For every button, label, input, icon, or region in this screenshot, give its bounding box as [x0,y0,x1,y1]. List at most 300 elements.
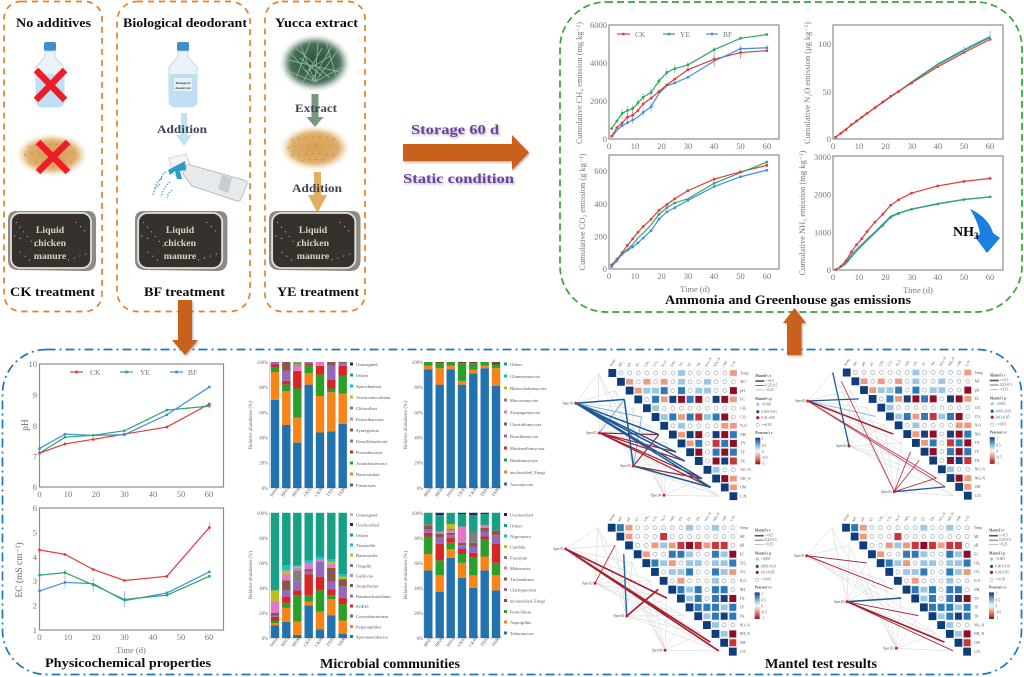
chart: cumulative CH4 emission: 60 [763,141,771,151]
legend: fungi phylum: Zoopagomycota [510,410,540,415]
legend: bacteria genus: Peptoniphilus [356,624,381,630]
chart: stacked bars bacteria phylum: BF060 [291,484,303,498]
chart: stacked bars bacteria genus: BF030 [280,634,292,648]
chart: stacked bars fungi phylum: Initial [445,485,456,498]
heading: no additives: No additives [16,15,91,30]
chart: mantel test top left: Spec03 [620,464,631,468]
chart: mantel test bottom right: TN [974,597,979,601]
chart: mantel test top right: 0.5 [996,444,1001,448]
heading: ammonia and greenhouse gas emissions: Ammonia and Greenhouse gas emissions [665,292,911,307]
legend: bacteria phylum: Chloroflexi [356,406,378,411]
chart: cumulative N2O emission: 10 [855,141,863,151]
chart: mantel test bottom left: <0.25 [765,543,773,547]
chart: stacked bars bacteria genus: CK030 [302,633,315,648]
legend: bacteria genus: Unassigned [356,512,378,518]
chart: cumulative CO2 emission: 400 [594,199,607,209]
chart: cumulative CH4 emission: 0 [607,141,611,151]
chart: mantel test top right: TP [921,361,927,367]
chart: cumulative CH4 emission: 4000 [590,58,607,68]
chart: cumulative NH3 emission: 0 [827,265,831,275]
chart: EC: 5 [33,528,37,538]
icon: yucca plant [280,35,350,91]
chart: mantel test bottom left: >=0.05 [761,578,771,582]
chart: cumulative CH4 emission: 50 [736,141,745,151]
chart: mantel test top right: TN [913,361,919,367]
chart: EC: 20 [92,632,100,642]
chart: stacked bars fungi phylum: 80% [414,386,423,391]
chart: mantel test top right: pH [861,361,866,367]
chart: mantel test bottom left: NH₃ [669,514,676,522]
chart: stacked bars bacteria genus: 20% [259,612,268,617]
chart: mantel test top right: OM [975,485,981,489]
chart: stacked bars bacteria genus: Relative abundance (%) [249,551,254,599]
legend: bacteria phylum: Proteobacteria [356,450,383,455]
chart: mantel test top right: CH₄ [975,406,982,410]
chart: stacked bars bacteria genus [249,512,391,648]
chart: mantel test top right: pH [975,388,979,392]
heading: biological deodorant: Biological deodorant [123,15,248,30]
chart: stacked bars bacteria phylum: CK030 [302,483,315,498]
legend: fungi phylum: Others [510,362,522,367]
chart: mantel test bottom right: NH₄-N [974,632,985,636]
legend: fungi phylum: Ascomycota [510,482,533,487]
icon: deodorant bottle: deodorant [175,86,192,90]
chart: cumulative N2O emission: 60 [986,141,994,151]
chart: mantel test top right: <0.25 [1000,388,1008,392]
chart: mantel test bottom left: Temp [740,526,748,530]
legend: fungi genus: Malassezia [510,566,530,571]
chart: mantel test bottom right: Pearson's r [989,586,1007,590]
icon: liquid chicken manure tray: manure [164,251,197,262]
chart: cumulative N2O emission: 100 [818,39,831,49]
chart: mantel test bottom left: CO₂ [740,570,747,574]
chart: stacked bars bacteria phylum: 80% [259,386,268,391]
chart: mantel test top left: pH [626,361,632,368]
chart: mantel test top left: NH₃ [740,433,747,437]
legend: fungi phylum: Blastocladiomycota [510,386,546,391]
chart: mantel test bottom left: OM [740,641,746,645]
legend: fungi phylum: unclassified_Fungi [510,470,546,475]
chart: mantel test bottom right: TP [920,517,926,522]
chart: mantel test bottom right: 0.001-0.01 [995,565,1011,569]
legend: fungi genus: Cladosporium [510,588,536,592]
chart: stacked bars fungi genus: Relative abundance (%) [404,551,409,599]
chart: cumulative CH4 emission: 10 [631,141,639,151]
label: BF treatment: BF treatment [144,284,226,299]
icon: crossed-out bottle [36,42,65,107]
chart: mantel test top right: <0.001 [996,402,1006,406]
chart: stacked bars bacteria phylum: 100% [257,361,268,366]
chart: stacked bars fungi genus: 0% [417,637,423,642]
chart: cumulative N2O emission: 0 [831,141,835,151]
legend: bacteria phylum: Bacteroidota [356,472,379,477]
chart: cumulative CO2 emission: Time (d) [680,284,710,294]
chart: mantel test top right: Temp [843,358,851,367]
chart: mantel test bottom right: N₂O [894,514,901,522]
chart: mantel test bottom left: TN [740,597,745,601]
chart: mantel test top left: >=0.05 [761,423,772,427]
heading: microbial communities: Microbial communities [320,657,461,672]
label: YE treatment: YE treatment [277,284,360,299]
chart: pH: CK [90,368,101,377]
chart: mantel test bottom right: CO₂ [886,514,893,522]
legend: fungi genus: Trichoderma [510,577,534,582]
chart: mantel test top right: NH₃ [904,359,911,367]
chart: mantel test top left: Spec01 [563,402,573,406]
chart: stacked bars bacteria genus: BF060 [291,634,303,648]
chart: mantel test top right: -1 [996,462,999,466]
chart: cumulative N2O emission: Cumulative N₂O emission (μg kg⁻¹) [803,22,812,144]
chart: mantel test bottom right: NO₃-N [974,623,985,627]
chart: cumulative NH3 emission: 3000 [814,152,831,162]
chart: mantel test top left: pH [740,389,745,393]
chart: mantel test top left [563,356,777,499]
chart: pH: 10 [64,489,72,499]
chart: mantel test top right: TP [975,450,979,454]
chart: mantel test bottom right: Spec02 [834,600,845,604]
chart: mantel test bottom left: NO₃-N [740,623,750,627]
chart: mantel test bottom right: OM [955,514,962,522]
chart: mantel test bottom left: MC [617,515,624,522]
chart: pH: 30 [120,489,129,499]
chart: mantel test top left: TK [740,459,745,463]
chart: mantel test bottom left: TP [740,606,744,610]
chart: mantel test top left: NH₄-N [740,477,751,481]
chart: stacked bars fungi genus: 100% [412,512,423,517]
legend: bacteria genus: Atopobacter [356,584,379,588]
chart: mantel test bottom left: NH₄-N [712,511,721,522]
chart: mantel test bottom left: TP [686,517,692,522]
icon: deodorant bottle [169,42,197,107]
icon: liquid chicken manure tray: manure [34,251,67,262]
legend: fungi phylum: Basidiomycota [510,458,538,463]
legend: fungi phylum: Rozellomycota [510,434,538,439]
chart: pH: 9 [33,390,37,400]
chart: cumulative N2O emission: 20 [881,141,890,151]
chart: mantel test bottom right: NH₄-N [946,511,955,522]
chart: mantel test top right: Spec01 [795,399,806,403]
chart: mantel test bottom left: EC [740,553,745,557]
chart: mantel test top right: MC [975,380,981,384]
chart: stacked bars fungi phylum: 0% [417,487,423,492]
legend: fungi genus: Penicillium [510,610,532,614]
chart: stacked bars fungi genus: CK030 [456,633,469,648]
chart: pH: pH [21,419,31,431]
chart: mantel test top right: CO₂ [975,415,982,419]
legend: fungi phylum: Mucoromycota [510,398,538,403]
chart: mantel test top right: Spec03 [881,490,892,494]
chart: mantel test top left: CO₂ [740,415,747,419]
chart: mantel test top right [795,356,1012,498]
chart: mantel test bottom left: TK [740,615,745,619]
chart: stacked bars bacteria genus: YE060 [336,633,348,648]
legend: fungi phylum [504,362,546,487]
chart: mantel test top left: 0.25-0.5 [765,384,777,388]
chart: EC: 30 [120,632,129,642]
chart: mantel test top left: OM [740,486,747,490]
chart: mantel test bottom right: NH₃ [903,514,910,522]
chart: mantel test bottom left: <0.001 [761,557,771,561]
chart: mantel test top right: 0.001-0.01 [996,410,1011,414]
chart: mantel test bottom left: CH₄ [740,561,747,565]
panel: BF treatment [117,2,250,312]
chart: mantel test bottom right: 1 [996,592,998,596]
chart: mantel test top right: NO₃-N [975,468,985,472]
chart: stacked bars bacteria genus: 0% [262,637,268,642]
legend: fungi genus: Aspergillus [510,620,531,625]
chart: mantel test bottom left: MC [740,535,746,539]
chart: mantel test top left: 1 [762,437,764,441]
chart: mantel test top left: OM [722,360,728,368]
chart: mantel test bottom right: Spec03 [883,647,894,651]
chart: mantel test top right: EC [869,361,875,367]
chart: mantel test top left: -0.5 [762,456,768,460]
chart: EC: EC (mS cm⁻¹) [14,542,25,598]
chart: mantel test bottom left: CO₂ [652,514,659,522]
chart: stacked bars bacteria genus: 60% [259,562,268,567]
chart: cumulative NH3 emission: Cumulative NH₃ emission (mg kg⁻¹) [798,150,807,276]
chart: mantel test bottom left: 0.001-0.01 [761,565,776,569]
legend: fungi phylum: Chytridiomycota [510,422,541,427]
chart: mantel test top right: N₂O [975,424,982,428]
chart: mantel test bottom right: 0 [996,605,998,609]
chart: cumulative CH4 emission: 2000 [590,96,607,106]
chart: mantel test bottom right: CO₂ [974,570,981,574]
chart: stacked bars fungi phylum: 20% [414,462,423,466]
chart: cumulative CO2 emission: 30 [684,271,692,281]
chart: stacked bars bacteria phylum: YE060 [336,483,348,498]
chart: mantel test bottom left: Spec02 [582,582,593,586]
panel: ammonia and greenhouse gas emissions [560,2,1022,312]
chart: mantel test bottom right: pH [974,544,979,548]
chart: mantel test top left: C/N [740,495,747,499]
chart: stacked bars fungi genus: BF030 [423,634,434,648]
chart: stacked bars fungi phylum: 100% [412,361,423,366]
chart: mantel test top right: NH₄-N [975,476,985,480]
chart: stacked bars bacteria phylum: YE030 [325,483,337,498]
chart: pH: 0 [37,489,42,499]
chart: mantel test bottom left: NO₃-N [704,511,712,522]
chart: cumulative CH4 emission [575,20,779,151]
chart: stacked bars bacteria genus: CK060 [314,633,326,648]
chart: cumulative NH3 emission: 0 [831,272,835,282]
chart: mantel test top right: CH₄ [878,359,885,367]
chart: mantel test top right: Mantel's r [990,374,1006,378]
chart: stacked bars fungi phylum: YE030 [479,483,491,498]
chart: mantel test bottom left: 0.01-0.05 [761,571,775,575]
chart: mantel test bottom right [794,511,1011,654]
chart: mantel test bottom right: CH₄ [877,514,884,522]
chart: mantel test bottom left: TN [678,516,684,522]
chart: mantel test bottom left: N₂O [740,579,747,583]
chart: cumulative N2O emission: 30 [908,141,916,151]
legend: bacteria genus: Ruminiclostridium [356,594,391,599]
chart: mantel test top right: TN [975,441,980,445]
chart: stacked bars bacteria genus: 40% [259,587,268,592]
chart: stacked bars bacteria genus: 80% [259,537,268,542]
chart: pH: 60 [205,489,213,499]
chart: mantel test bottom left: >=0.5 [765,534,773,538]
chart: mantel test top right: 0.01-0.05 [996,416,1010,420]
legend: bacteria phylum: Unassigned [356,362,378,367]
chart: mantel test top right: Pearson's r [990,430,1007,434]
chart: mantel test top left: Pearson's r [755,431,773,435]
legend: bacteria genus: Corynebacterium [356,614,388,619]
chart: cumulative CH4 emission: BF [723,30,732,39]
icon: liquid chicken manure tray [8,211,96,271]
legend: fungi phylum: Mortierellomycota [510,446,544,451]
chart: mantel test top left: CO₂ [652,359,659,368]
chart: EC [14,503,224,655]
chart: cumulative CO2 emission: 40 [710,271,718,281]
chart: stacked bars bacteria genus: YE030 [325,633,337,648]
heading: yucca extract: Yucca extract [275,15,359,30]
chart: cumulative NH3 emission: 50 [960,272,968,282]
chart: cumulative CO2 emission: 0 [603,264,607,274]
label: CK treatment: CK treatment [10,284,96,299]
legend: fungi genus: Unclassified [510,512,534,518]
chart: cumulative N2O emission [803,22,1003,151]
chart: pH: BF [188,368,197,377]
icon: liquid chicken manure tray: manure [297,251,330,262]
chart: mantel test bottom right: TK [929,516,935,522]
chart: mantel test bottom right: EC [868,516,874,522]
chart: mantel test bottom left: N₂O [660,514,667,522]
chart: mantel test top left: Temp [740,371,748,375]
chart: stacked bars fungi genus: 20% [414,612,423,617]
chart: mantel test bottom left: TK [695,516,701,522]
legend: fungi genus: Candida [510,544,525,550]
chart: mantel test bottom right: Spec01 [794,554,805,558]
chart: pH: 6 [33,482,37,492]
chart: mantel test top left: -1 [762,462,765,466]
arrow: extract green [306,94,324,127]
chart: cumulative CH4 emission: 6000 [590,20,607,30]
chart: cumulative CO2 emission: Cumulative CO₂ emission (g kg⁻¹) [578,153,587,270]
chart: mantel test bottom right: -1 [996,617,999,621]
chart: EC: 40 [149,632,157,642]
chart: mantel test bottom left: Mantel's r [755,529,771,533]
chart: mantel test bottom right: OM [974,641,981,645]
legend: bacteria genus: SOEI3 [356,604,369,609]
chart: mantel test top left: TN [678,361,684,368]
chart: mantel test bottom left: Temp [608,513,616,522]
icon: spray bottle [153,154,247,201]
chart: EC: 4 [33,552,38,562]
label: storage 60 d: Storage 60 d [411,123,499,138]
legend: bacteria genus: Olsgella [356,564,371,568]
chart: stacked bars fungi genus [404,512,546,648]
chart: mantel test bottom right: -0.5 [996,611,1001,615]
legend: fungi genus: Fusarium [510,556,528,560]
icon: deodorant bottle: Biological [176,81,190,85]
chart: mantel test top left: EC [635,361,641,368]
label: NH3: 3 [974,231,979,241]
chart: mantel test top left: EC [740,398,745,402]
chart: mantel test bottom left: EC [634,516,640,522]
chart: mantel test bottom right: C/N [974,650,980,654]
chart: mantel test top left: 0.001-0.01 [761,410,777,414]
chart: EC: 0 [37,632,42,642]
chart: cumulative CO2 emission: 60 [763,271,771,281]
chart: mantel test bottom right: <0.001 [995,557,1005,561]
chart: cumulative CH4 emission: Cumulative CH₄ emission (mg kg⁻¹) [575,22,584,144]
chart: stacked bars bacteria phylum: 0% [262,487,268,492]
chart: mantel test bottom right: TK [974,615,979,619]
chart: mantel test bottom left: -0.5 [761,611,767,615]
chart: mantel test bottom right: Mantel's p [989,552,1005,556]
chart: cumulative CH4 emission: YE [680,30,690,39]
arrow: addition light blue [176,113,192,146]
chart: mantel test top right: TK [930,361,936,367]
chart: stacked bars fungi phylum: 60% [414,412,423,416]
chart: mantel test bottom right: NO₃-N [938,511,947,522]
chart: stacked bars fungi phylum [404,361,546,498]
icon: liquid chicken manure tray [269,211,361,271]
chart: mantel test top left: <0.25 [765,388,774,392]
chart: mantel test bottom right: 0.25-0.5 [999,538,1011,542]
chart: mantel test bottom right: 0.5 [996,599,1000,603]
icon: liquid chicken manure tray: chicken [34,238,67,249]
chart: mantel test top right: 1 [996,436,998,440]
chart: mantel test top left: Temp [609,358,616,368]
chart: cumulative CO2 emission: 200 [594,232,607,242]
chart: mantel test top left: MC [618,360,624,368]
chart: pH: YE [140,368,150,377]
chart: mantel test bottom right: <0.25 [999,543,1008,547]
chart: mantel test bottom right: 0.01-0.05 [995,571,1009,575]
chart: stacked bars bacteria genus: 100% [257,512,268,517]
chart: mantel test bottom right: Mantel's r [989,529,1005,533]
icon: liquid chicken manure tray: chicken [164,238,197,249]
chart: stacked bars fungi genus: YE060 [490,633,502,648]
legend: fungi genus: Talaromyces [510,631,534,636]
chart: stacked bars fungi phylum: BF060 [434,484,446,498]
icon: liquid chicken manure tray: Liquid [166,225,195,236]
chart: cumulative NH3 emission: 40 [934,272,942,282]
chart: mantel test bottom left: pH [626,516,631,522]
chart: mantel test bottom left: C/N [730,515,736,522]
chart: mantel test top left: CH₄ [644,359,651,368]
chart: stacked bars bacteria phylum: 40% [259,436,268,442]
legend: bacteria phylum: Others [356,373,368,378]
chart: mantel test top left: C/N [730,360,737,368]
panel: lower results [2,350,1022,674]
chart: mantel test top right: EC [975,397,980,401]
chart: mantel test top left: MC [740,380,746,384]
label: extract: Extract [295,101,337,115]
chart: mantel test bottom right: N₂O [974,579,981,583]
chart: mantel test top right: C/N [965,359,971,367]
chart: stacked bars fungi phylum: YE060 [490,483,502,498]
chart: mantel test bottom left: Mantel's p [755,552,771,556]
chart: mantel test top right: CO₂ [887,359,894,367]
chart: cumulative NH3 emission: 30 [908,272,916,282]
chart: stacked bars fungi genus: YE030 [479,633,491,648]
chart: mantel test bottom left: Spec01 [553,547,564,551]
chart: cumulative NH3 emission: 10 [855,272,863,282]
chart: mantel test bottom left: Spec03 [614,614,624,618]
chart: mantel test top left: TN [740,442,745,446]
chart: mantel test bottom right: MC [851,515,858,522]
icon: yucca powder [280,126,350,170]
legend: fungi genus [504,512,546,636]
chart: mantel test top left: Mantel's r [755,374,772,378]
chart: mantel test bottom right: Temp [974,526,982,530]
arrow: main storage arrow [403,135,529,170]
arrow: up to emissions panel [783,308,806,355]
chart: cumulative CH4 emission: 40 [710,141,718,151]
